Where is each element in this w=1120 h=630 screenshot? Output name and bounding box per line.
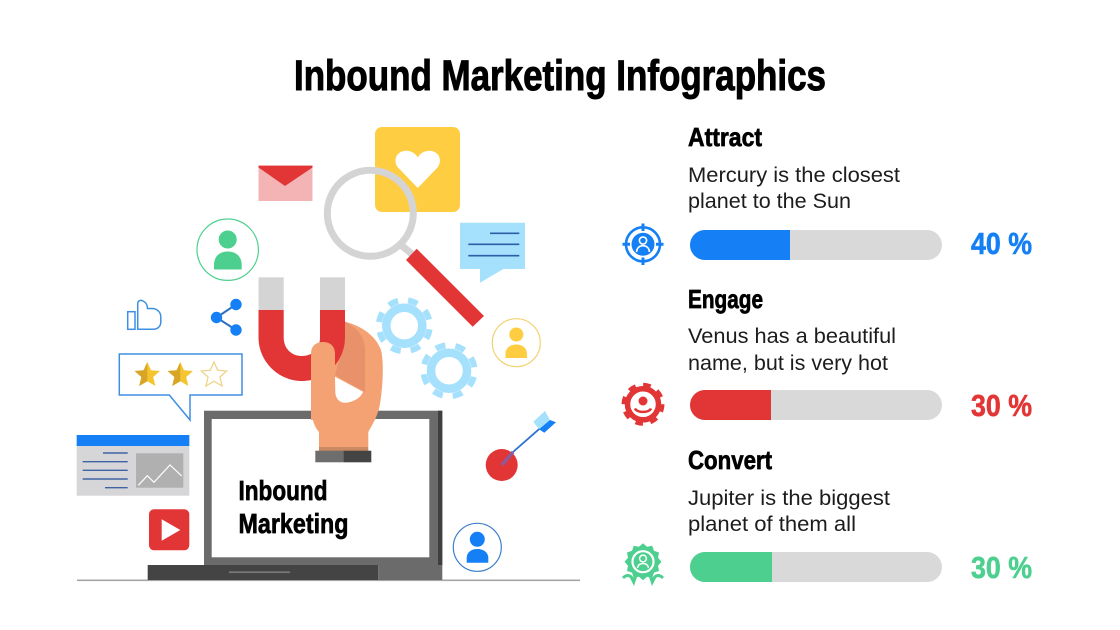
- icon: play button: [149, 509, 189, 550]
- icon: gear two: [418, 340, 480, 402]
- panel: engage: [624, 284, 1032, 424]
- icon: thumbs up: [128, 300, 161, 329]
- magnet: [258, 277, 345, 381]
- text: convert description: Jupiter is the biggest: [688, 486, 890, 510]
- icon: blue user: [453, 523, 501, 571]
- laptop: [148, 411, 442, 580]
- text: engage description: name, but is very hot: [688, 351, 888, 375]
- text: convert description: [688, 486, 890, 536]
- icon: chat bubble: [460, 223, 525, 283]
- ground line: [77, 580, 580, 581]
- icon: share: [211, 299, 242, 336]
- icon: empty star: [201, 362, 227, 386]
- value: 40 percent: 40 %: [971, 226, 1032, 261]
- text: attract description: [688, 163, 900, 213]
- icon: filled star: [168, 362, 193, 386]
- panel: convert: [623, 445, 1032, 586]
- icon: yellow user: [492, 319, 540, 367]
- icon: dart and target: [486, 411, 556, 481]
- progress bar: 30 percent: [690, 390, 942, 420]
- heading: convert: Convert: [688, 445, 772, 475]
- laptop label: Inbound: [238, 475, 328, 506]
- illustration: inbound marketing scene: [77, 127, 580, 581]
- icon: magnifying glass: [327, 170, 484, 327]
- shirt cuff: [315, 447, 371, 462]
- text: convert description: planet of them all: [688, 512, 856, 536]
- heading: engage: Engage: [688, 284, 763, 314]
- text: attract description: Mercury is the closest: [688, 163, 900, 187]
- text: attract description: planet to the Sun: [688, 189, 851, 213]
- progress bar: 30 percent: [690, 552, 942, 582]
- value: 30 percent: 30 %: [971, 550, 1032, 585]
- icon: gear user: [624, 385, 662, 424]
- hand finger and grip: [311, 342, 363, 420]
- heading: attract: Attract: [688, 122, 762, 152]
- text: engage description: Venus has a beautiful: [688, 324, 896, 348]
- hand shadow: [335, 322, 365, 392]
- icon: filled star: [135, 362, 160, 386]
- title: Inbound Marketing Infographics: [294, 52, 826, 100]
- rating speech bubble: [119, 354, 242, 420]
- progress bar: 40 percent: [690, 230, 942, 260]
- value: 30 percent: 30 %: [971, 388, 1032, 423]
- icon: award rosette: [623, 543, 663, 586]
- icon: envelope: [258, 166, 312, 201]
- icon: gear one: [375, 297, 433, 355]
- icon: target user: [622, 224, 664, 265]
- panel: attract: [622, 122, 1032, 265]
- icon: green user: [197, 219, 258, 280]
- laptop label: Marketing: [238, 508, 348, 539]
- icon: heart card: [375, 127, 460, 212]
- web page panel: [77, 435, 189, 496]
- hand palm: [311, 322, 383, 447]
- laptop label: [238, 475, 348, 539]
- text: engage description: [688, 324, 896, 375]
